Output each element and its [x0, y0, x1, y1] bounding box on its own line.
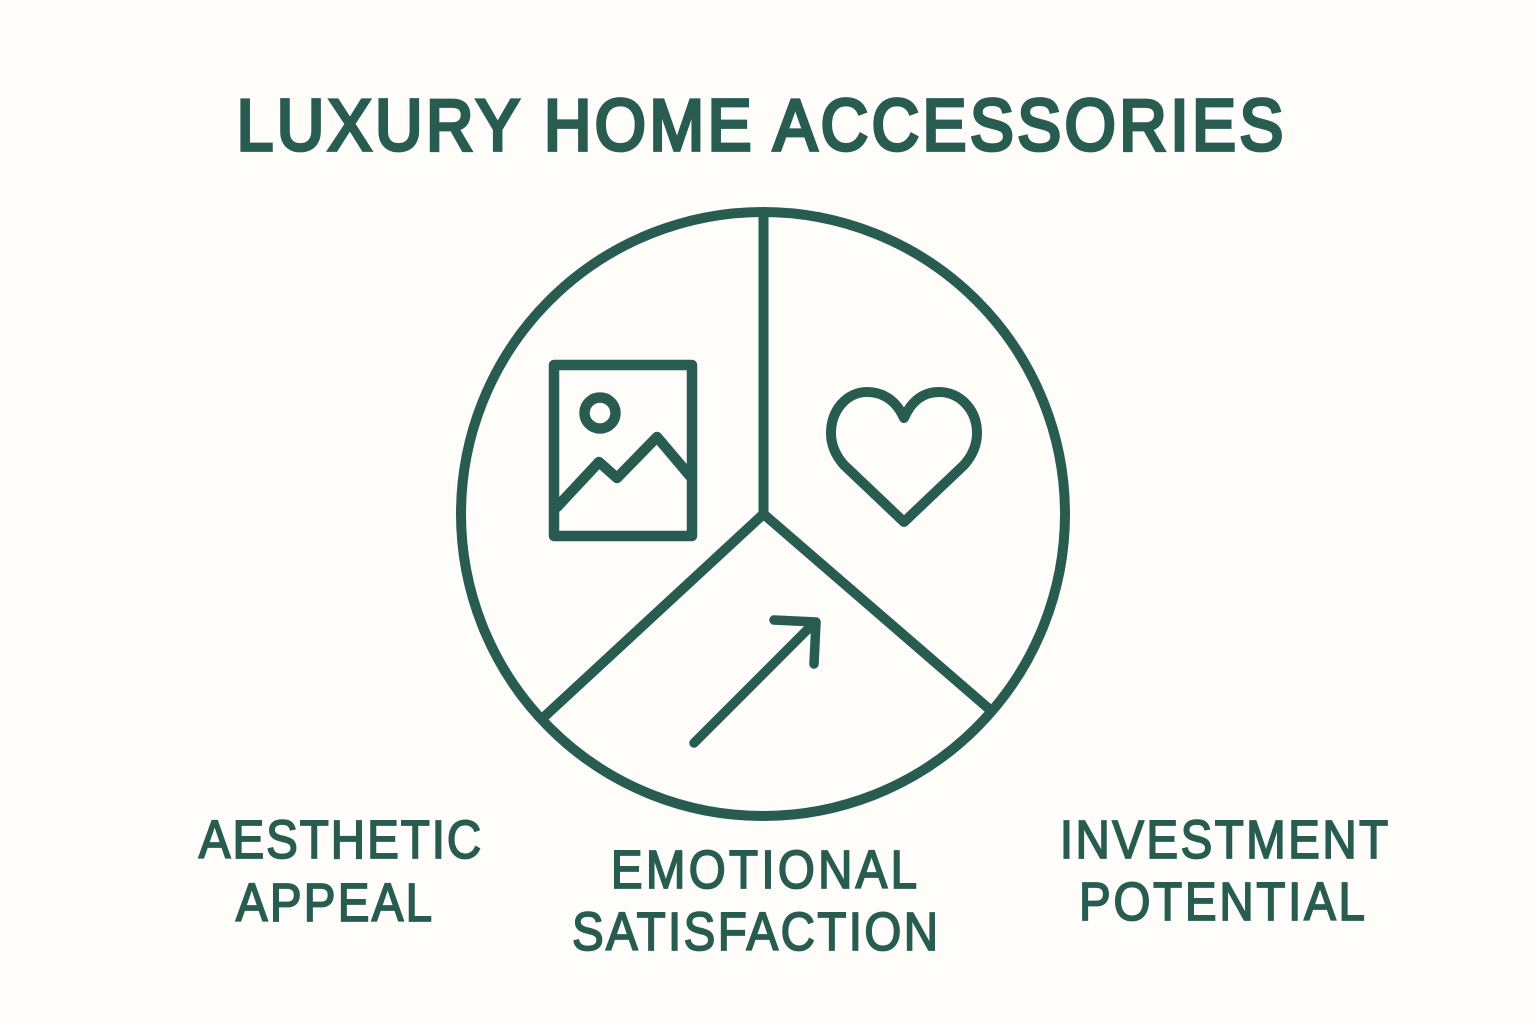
icon: growth arrow	[694, 620, 816, 743]
icon: framed picture	[554, 365, 692, 536]
pie diagram	[461, 212, 1065, 816]
circle outline	[461, 212, 1065, 816]
label: investment potential: INVESTMENT	[1060, 809, 1388, 870]
title: LUXURY HOME ACCESSORIES	[237, 85, 1283, 166]
label: emotional satisfaction: SATISFACTION	[572, 901, 938, 962]
label: investment potential	[1060, 809, 1388, 932]
label: aesthetic appeal: APPEAL	[236, 872, 432, 933]
icon: heart	[831, 392, 977, 522]
label: emotional satisfaction: EMOTIONAL	[611, 839, 917, 900]
segment dividers	[544, 214, 988, 717]
label: aesthetic appeal	[199, 809, 481, 933]
label: investment potential: POTENTIAL	[1079, 871, 1365, 932]
label: aesthetic appeal: AESTHETIC	[199, 809, 481, 870]
label: emotional satisfaction	[572, 839, 938, 962]
